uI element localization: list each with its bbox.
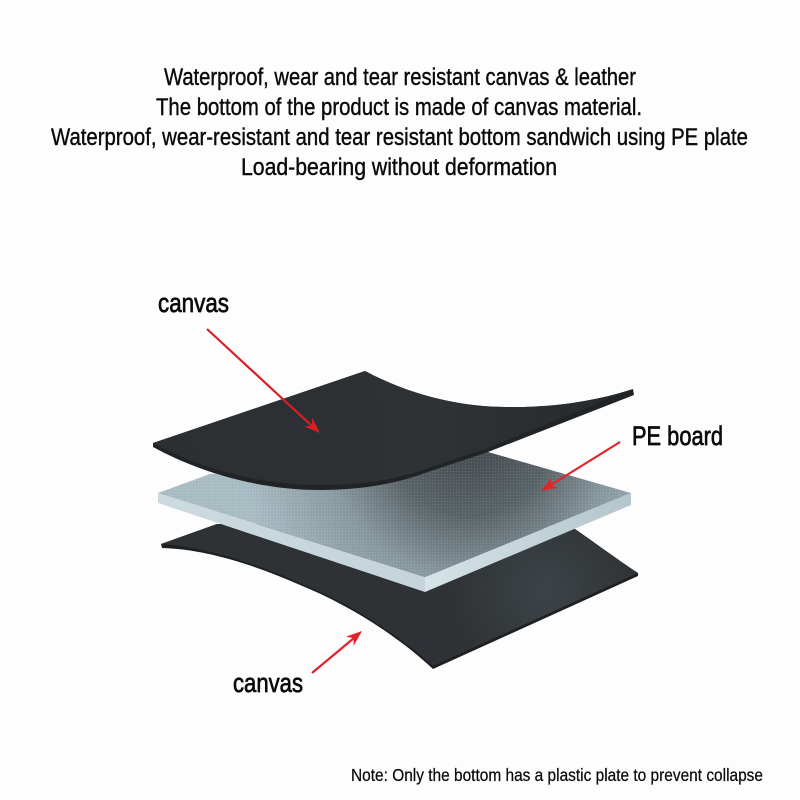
bottom canvas sheet bbox=[161, 524, 638, 669]
arrow: PE board bbox=[541, 442, 620, 491]
PE board bbox=[158, 452, 631, 592]
top canvas sheet bbox=[153, 371, 634, 490]
label: bottom canvas: canvas bbox=[233, 668, 303, 698]
heading: product description: Waterproof, wear and tear resistant canvas & leather bbox=[164, 64, 636, 91]
heading: product description: The bottom of the product is made of canvas material. bbox=[156, 94, 642, 121]
layered material diagram bbox=[153, 371, 638, 669]
label: top canvas: canvas bbox=[158, 288, 229, 318]
heading: product description: Load-bearing without deformation bbox=[241, 154, 557, 181]
arrow: bottom canvas bbox=[312, 631, 362, 673]
label: PE board: PE board bbox=[632, 421, 723, 451]
heading: product description bbox=[51, 64, 748, 181]
arrow: top canvas bbox=[207, 329, 320, 433]
